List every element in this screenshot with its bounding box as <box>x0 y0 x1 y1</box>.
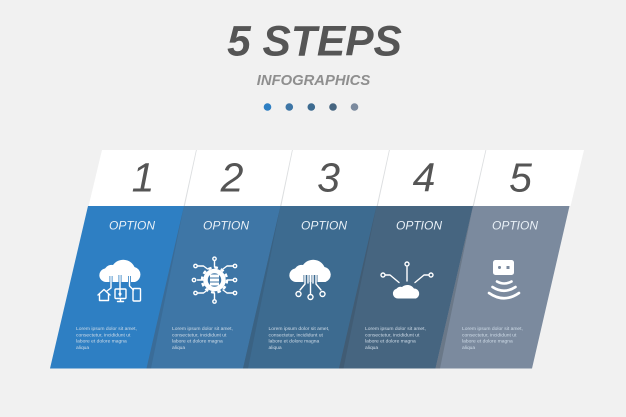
body text 3: aliqua <box>268 345 282 351</box>
icon: sensor with signal waves <box>489 260 519 298</box>
option label 5: OPTION <box>492 218 538 232</box>
option label 2: OPTION <box>203 218 249 232</box>
icon: gear with circuit nodes <box>192 257 237 303</box>
body text 4: aliqua <box>365 345 378 351</box>
white number band <box>89 150 584 206</box>
option label 3: OPTION <box>301 218 347 232</box>
panel: step 4 <box>339 154 474 368</box>
body text 1: aliqua <box>76 345 89 351</box>
title: 5 STEPS <box>227 18 402 66</box>
body text 2: labore et dolore magna <box>172 339 223 345</box>
body text 4: labore et dolore magna <box>365 339 416 345</box>
number 4: 4 <box>413 154 435 200</box>
option label 1: OPTION <box>109 218 155 232</box>
body text 5: Lorem ipsum dolor sit amet, <box>462 326 523 332</box>
option label 4: OPTION <box>396 218 442 232</box>
body text 5: consectetur, incididunt ut <box>462 332 517 338</box>
icon: cloud with three links <box>381 262 433 299</box>
panel: step 2 <box>146 154 281 368</box>
body text 1: labore et dolore magna <box>76 339 127 345</box>
body text 5: labore et dolore magna <box>462 339 513 345</box>
body text 4: Lorem ipsum dolor sit amet, <box>365 326 426 332</box>
panel 3 fold shadow <box>243 206 280 368</box>
panel: step 5 <box>436 154 570 368</box>
body text 2: consectetur, incididunt ut <box>172 332 227 338</box>
number 2: 2 <box>220 154 244 200</box>
body text 5: aliqua <box>462 345 475 351</box>
panel: step 1 <box>50 154 185 368</box>
icon: cloud with devices <box>98 260 140 302</box>
number 3: 3 <box>317 154 340 200</box>
number 5: 5 <box>509 154 532 200</box>
panel 4 fold shadow <box>339 206 376 368</box>
number 1: 1 <box>132 154 154 200</box>
subtitle: INFOGRAPHICS <box>257 73 370 89</box>
panel 2 fold shadow <box>146 206 184 368</box>
body text 4: consectetur, incididunt ut <box>365 332 420 338</box>
body text 1: consectetur, incididunt ut <box>76 332 131 338</box>
body text 3: Lorem ipsum dolor sit amet, <box>268 326 329 332</box>
panel: step 3 <box>243 154 377 368</box>
body text 2: Lorem ipsum dolor sit amet, <box>172 326 233 332</box>
panel 5 fold shadow <box>436 206 473 368</box>
icon: cloud circuit <box>289 260 331 300</box>
body text 2: aliqua <box>172 345 185 351</box>
body text 3: labore et dolore magna <box>268 339 320 345</box>
progress dots <box>264 103 358 111</box>
body text 1: Lorem ipsum dolor sit amet, <box>76 326 137 332</box>
body text 3: consectetur, incididunt ut <box>268 332 323 338</box>
